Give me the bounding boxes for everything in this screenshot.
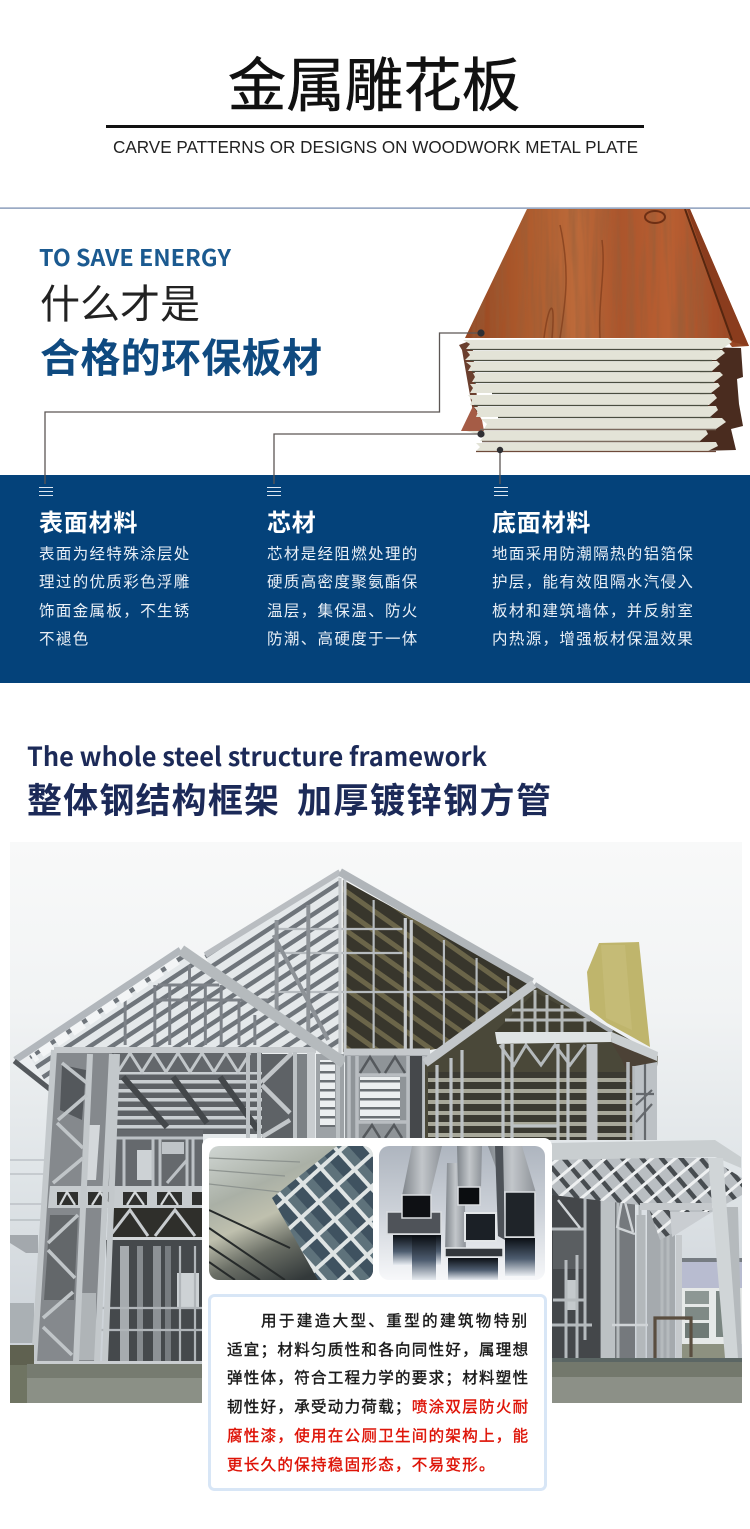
right lower frame: [552, 1195, 600, 1360]
chimney insulation: [587, 942, 650, 1047]
horizontal truss band: [48, 1186, 203, 1208]
layer seams: [470, 350, 720, 418]
title: CARVE PATTERNS OR DESIGNS ON WOODWORK METAL PLATE: [113, 137, 638, 157]
column: surface material: [39, 488, 191, 648]
panel: energy saving heading: 合格的环保板材: [40, 326, 322, 384]
heading: steel structure framework: 整体钢结构框架: [27, 773, 279, 824]
column: bottom material: 板材和建筑墙体，并反射室: [492, 602, 694, 620]
joist room: [112, 1072, 262, 1134]
description text: 弹性体，符合工程力学的要求；材料塑性: [227, 1369, 529, 1387]
left wall columns: [34, 1050, 117, 1362]
left bracing: [43, 1063, 87, 1355]
title: [106, 38, 644, 157]
truss top band: [112, 1052, 262, 1072]
photo: steel frame house: [10, 842, 742, 1403]
column: bottom material: 底面材料: [492, 510, 591, 537]
panel: energy saving heading: TO SAVE ENERGY: [39, 239, 232, 273]
dark panel ends: [700, 347, 743, 451]
panel: energy saving heading: [39, 239, 322, 384]
heading: steel structure framework: 加厚镀锌钢方管: [297, 773, 551, 824]
upper roof frames: [14, 872, 532, 1090]
canopy posts: [726, 1207, 742, 1358]
icon: lines: [494, 488, 508, 496]
description text: 适宜；材料匀质性和各向同性好，属理想: [227, 1341, 529, 1359]
canopy: [552, 1158, 742, 1240]
centre-left bay: [262, 1054, 294, 1138]
zigzag room: [108, 1208, 203, 1238]
title: 金属雕花板: [228, 38, 520, 123]
column: core material: 芯材: [267, 510, 317, 537]
upper room: [108, 1134, 203, 1186]
eave and cornice plate: [611, 1032, 658, 1061]
description text: 腐性漆，使用在公厕卫生间的架构上，能: [227, 1427, 529, 1445]
insulated wall panel stack: [459, 208, 750, 452]
column: bottom material: 内热源，增强板材保温效果: [492, 630, 694, 648]
lower-left wall bays: [37, 1053, 112, 1361]
image: square steel tubes: [379, 1146, 545, 1280]
description text: [227, 1312, 530, 1474]
distant wires and scaffold: [10, 1160, 44, 1220]
text box: [210, 1296, 546, 1490]
heading: steel structure framework: [27, 737, 551, 824]
info card: [202, 1138, 552, 1510]
column: core material: 防潮、高硬度于一体: [267, 630, 419, 648]
left gable infill: [29, 950, 316, 1090]
column: bottom material: 地面采用防潮隔热的铝箔保: [492, 545, 694, 563]
brown window frame: [655, 1318, 691, 1358]
icon: lines: [39, 488, 53, 496]
centre window frame: [345, 1052, 430, 1140]
column: bottom material: [492, 488, 694, 648]
panel: blue materials band: [0, 475, 750, 683]
description text: 更长久的保持稳固形态，不易变形。: [227, 1456, 496, 1474]
main roof right plane: [343, 880, 531, 1052]
wood surface panel: [460, 208, 750, 350]
skylight panes: [31, 958, 176, 1056]
column: core material: 温层，集保温、防火: [267, 602, 419, 620]
panel: energy saving heading: 什么才是: [40, 272, 200, 330]
description text: 用于建造大型、重型的建筑物特别: [261, 1312, 530, 1330]
wing columns: [437, 1044, 568, 1140]
column: surface material: 表面为经特殊涂层处: [39, 545, 191, 563]
icon: lines: [267, 488, 281, 496]
column: bottom material: 护层，能有效阻隔水汽侵入: [492, 573, 694, 591]
column: surface material: 不褪色: [39, 630, 90, 648]
column: core material: [267, 488, 419, 648]
small gable wing: [425, 985, 658, 1140]
column: core material: 芯材是经阻燃处理的: [267, 545, 419, 563]
callout lines and markers: [45, 329, 503, 484]
description text: 韧性好，承受动力荷载；喷涂双层防火耐: [227, 1398, 529, 1416]
lower room: [106, 1240, 203, 1362]
column: core material: 硬质高密度聚氨酯保: [267, 573, 419, 591]
column: surface material: 理过的优质彩色浮雕: [39, 573, 191, 591]
foam layers: [463, 338, 732, 451]
heading: steel structure framework: The whole steel structure framework: [27, 737, 487, 774]
main roof left plane: [204, 872, 340, 1048]
image: galvanized tube stack: [209, 1146, 373, 1280]
gable fascia: [15, 950, 181, 1060]
column: surface material: 饰面金属板，不生锈: [39, 602, 191, 620]
column: surface material: 表面材料: [39, 510, 138, 537]
neighbouring building: [678, 1258, 742, 1262]
ground and foundation: [10, 1345, 34, 1365]
right side bay: [635, 1062, 657, 1140]
main roof grid: [271, 900, 508, 1048]
